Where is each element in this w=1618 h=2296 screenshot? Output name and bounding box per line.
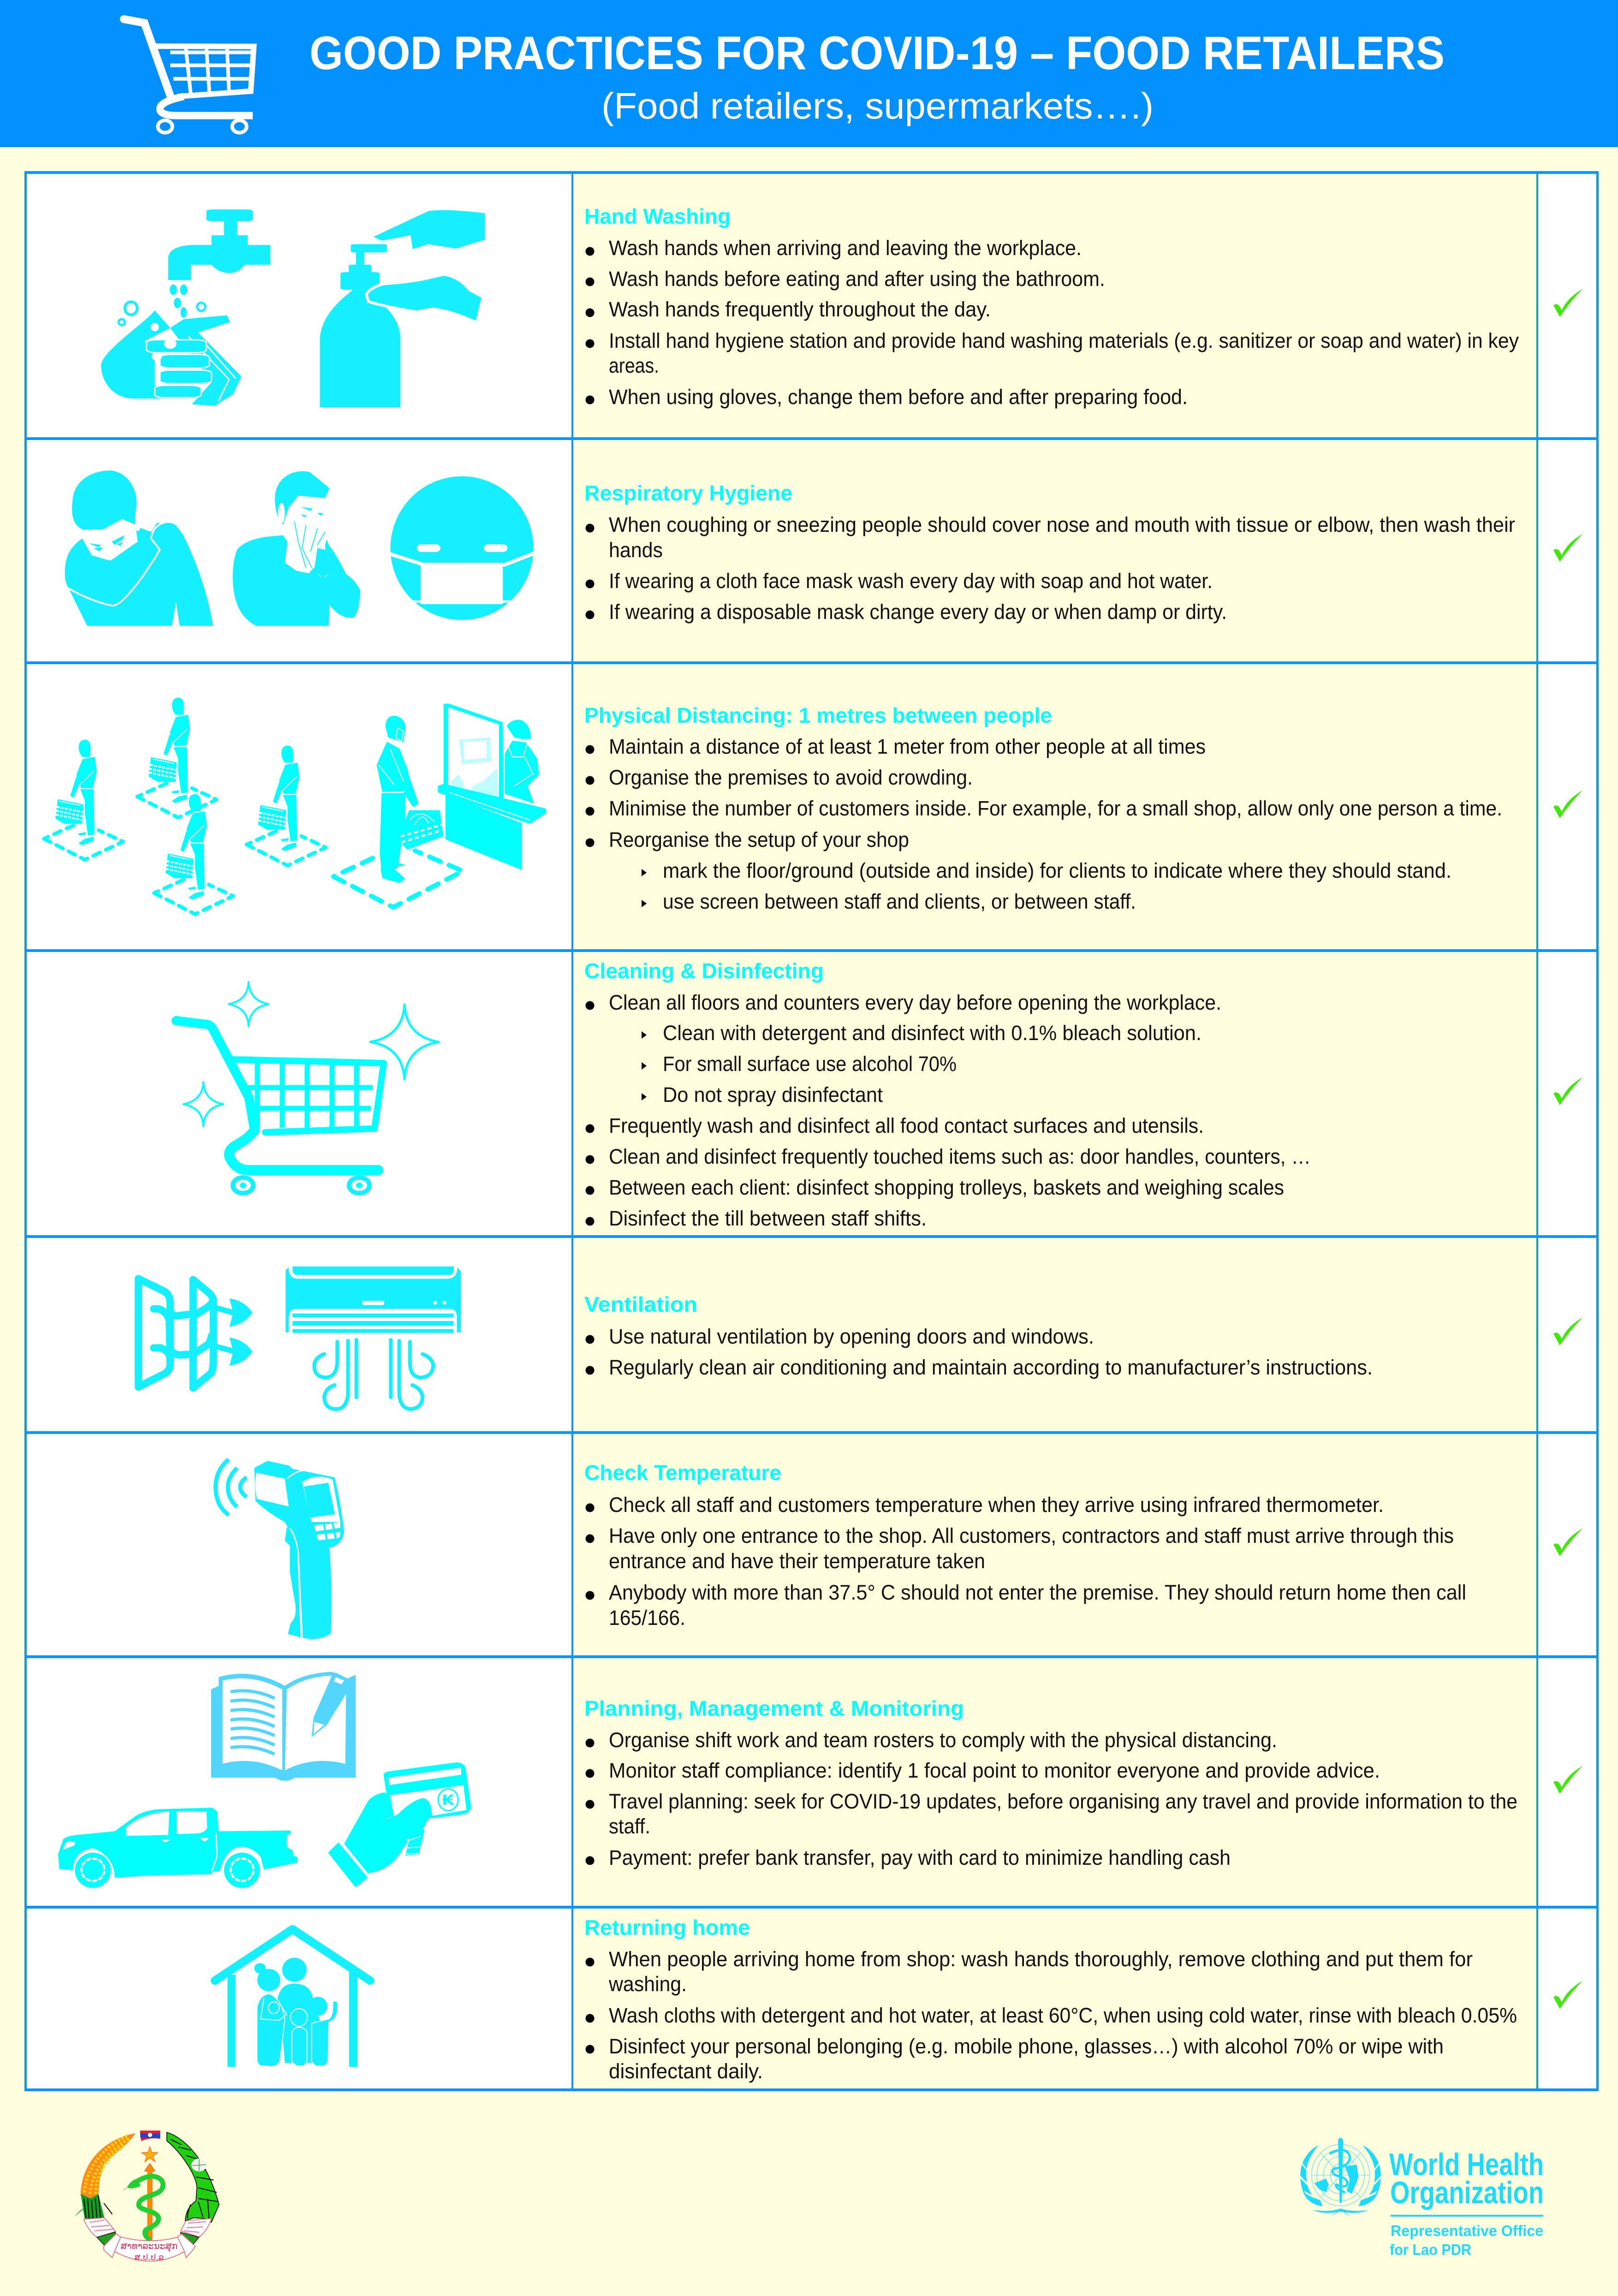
text block: hand washing: Wash hands before eating and after using the bathroom. (609, 267, 1105, 291)
text block: physical distancing: Reorganise the setup of your shop (609, 828, 909, 851)
panel: returning home (215, 1915, 1517, 2083)
text block: respiratory hygiene: Respiratory Hygiene (584, 481, 792, 505)
icon: book and pencil (211, 1672, 356, 1781)
text block: ventilation: Regularly clean air conditioning and maintain according to manufacturer’s instructions. (609, 1356, 1373, 1379)
icon: man coughing into elbow (65, 470, 213, 626)
text block: planning: Organise shift work and team rosters to comply with the physical distancing. (609, 1728, 1277, 1752)
icon: soap dispenser with hands (320, 210, 485, 407)
icon: hand holding payment card (328, 1762, 471, 1887)
icon: open windows with airflow (138, 1279, 252, 1388)
panel: ventilation (138, 1267, 1373, 1409)
text block: returning home: washing. (608, 1972, 687, 1996)
text block: respiratory hygiene: If wearing a disposable mask change every day or when damp or dirty. (609, 600, 1227, 624)
column of green check marks (1553, 289, 1583, 2009)
logo: Lao Ministry of Health emblem: ສາທາລະນະສຸກ (121, 2241, 178, 2252)
text block: returning home (584, 1915, 1517, 2083)
text block: returning home: disinfectant daily. (609, 2059, 763, 2083)
text block: check temperature: Check all staff and customers temperature when they arrive using infrared thermometer. (609, 1493, 1384, 1517)
text block: returning home: When people arriving home from shop: wash hands thoroughly, remove clothing and put them for (609, 1947, 1473, 1971)
icon: man sneezing into tissue (233, 471, 360, 626)
text block: hand washing: Wash hands when arriving and leaving the workplace. (609, 236, 1082, 260)
text block: physical distancing: mark the floor/ground (outside and inside) for clients to indicate where they should stand. (663, 859, 1451, 882)
text block: check temperature: entrance and have their temperature taken (609, 1549, 985, 1573)
text block: physical distancing: Physical Distancing: 1 metres between people (584, 703, 1052, 727)
text block: planning (584, 1696, 1517, 1869)
text block: respiratory hygiene: If wearing a cloth face mask wash every day with soap and hot water. (609, 569, 1213, 593)
icon: tap and washing hands (101, 209, 270, 406)
text block: cleaning and disinfecting (584, 959, 1311, 1230)
text block: hand washing: When using gloves, change them before and after preparing food. (609, 385, 1188, 409)
WHO emblem (1300, 2138, 1381, 2216)
text block: cleaning and disinfecting: Clean with detergent and disinfect with 0.1% bleach solution. (663, 1021, 1202, 1045)
text block: physical distancing (584, 703, 1502, 913)
logo: Lao Ministry of Health emblem (75, 2130, 219, 2262)
text block: returning home: Disinfect your personal belonging (e.g. mobile phone, glasses…) with alcohol 70% or wipe with (609, 2034, 1444, 2058)
text block: check temperature: Anybody with more than 37.5° C should not enter the premise. They should return home then call (609, 1581, 1466, 1604)
text block: physical distancing: Minimise the number of customers inside. For example, for a small shop, allow only one person a time. (609, 797, 1502, 820)
text block: check temperature: Have only one entrance to the shop. All customers, contractors and staff must arrive through this (609, 1524, 1454, 1547)
logo: World Health Organization (1300, 2138, 1544, 2258)
text block: planning: Payment: prefer bank transfer, pay with card to minimize handling cash (609, 1846, 1231, 1869)
text block: hand washing (584, 204, 1519, 409)
icon: air conditioner (286, 1267, 461, 1409)
text block: check temperature: 165/166. (609, 1606, 685, 1630)
text block: cleaning and disinfecting: Between each client: disinfect shopping trolleys, baskets and weighing scales (609, 1176, 1284, 1199)
text block: cleaning and disinfecting: Frequently wash and disinfect all food contact surfaces and utensils. (609, 1114, 1204, 1137)
logo: Lao Ministry of Health emblem: ສ.ປ.ປ.ລ (134, 2253, 164, 2262)
WHO name: World Health (1389, 2147, 1544, 2182)
text block: physical distancing: use screen between staff and clients, or between staff. (663, 890, 1136, 913)
text block: cleaning and disinfecting: Do not spray disinfectant (663, 1083, 883, 1106)
panel: planning, management and monitoring (58, 1672, 1517, 1888)
icon: family in house (215, 1929, 370, 2067)
text block: planning: Planning, Management & Monitoring (584, 1696, 964, 1720)
header banner (0, 0, 1618, 147)
panel: cleaning and disinfecting (176, 959, 1311, 1230)
panel: check temperature (216, 1459, 1466, 1639)
icon: face with mask (390, 476, 535, 620)
WHO name line 2: Organization (1390, 2175, 1544, 2210)
icon: clean shopping cart with sparkles (176, 982, 439, 1193)
text block: cleaning and disinfecting: Clean and disinfect frequently touched items such as: door handles, counters, … (609, 1145, 1311, 1168)
text block: returning home: Returning home (584, 1915, 750, 1939)
text block: physical distancing: Organise the premises to avoid crowding. (609, 766, 973, 789)
text block: hand washing: Hand Washing (584, 204, 731, 228)
icon: infrared thermometer (216, 1459, 344, 1639)
text block: planning: Travel planning: seek for COVID-19 updates, before organising any travel and provide information to the (609, 1790, 1517, 1813)
text block: hand washing: areas. (609, 354, 659, 377)
icon: customer at screened counter (333, 703, 546, 907)
text block: check temperature: Check Temperature (584, 1461, 781, 1485)
title: GOOD PRACTICES FOR COVID-19 – FOOD RETAILERS (309, 27, 1445, 79)
panel: respiratory hygiene (65, 470, 1515, 626)
text block: ventilation: Ventilation (584, 1292, 697, 1316)
icon: pickup truck (58, 1808, 297, 1888)
panel: physical distancing (44, 698, 1502, 914)
text block: cleaning and disinfecting: Disinfect the till between staff shifts. (609, 1207, 927, 1230)
text block: hand washing: Install hand hygiene station and provide hand washing materials (e.g. sanitizer or soap and water) in key (609, 329, 1519, 352)
text block: hand washing: Wash hands frequently throughout the day. (609, 297, 991, 321)
text block: ventilation: Use natural ventilation by opening doors and windows. (609, 1325, 1094, 1348)
icon: shoppers standing on floor markers (44, 698, 326, 914)
text block: respiratory hygiene: hands (609, 538, 663, 562)
office location: for Lao PDR (1390, 2241, 1471, 2258)
text block: check temperature (584, 1461, 1466, 1630)
text block: cleaning and disinfecting: For small surface use alcohol 70% (663, 1052, 957, 1076)
text block: respiratory hygiene: When coughing or sneezing people should cover nose and mouth with tissue or elbow, then wash their (609, 513, 1515, 536)
text block: cleaning and disinfecting: Cleaning & Disinfecting (584, 959, 824, 983)
office name: Representative Office (1391, 2222, 1543, 2239)
text block: physical distancing: Maintain a distance of at least 1 meter from other people at all times (609, 735, 1206, 758)
text block: planning: staff. (609, 1814, 650, 1838)
text block: ventilation (584, 1292, 1373, 1379)
icon: shopping cart (124, 19, 254, 133)
icon: hand holding payment card: ₭ (442, 1792, 455, 1808)
panel: hand washing (101, 204, 1519, 409)
text block: respiratory hygiene (584, 481, 1515, 624)
subtitle: (Food retailers, supermarkets….) (601, 85, 1154, 126)
text block: planning: Monitor staff compliance: identify 1 focal point to monitor everyone and provide advice. (609, 1759, 1380, 1782)
text block: cleaning and disinfecting: Clean all floors and counters every day before opening the workplace. (609, 991, 1221, 1014)
text block: returning home: Wash cloths with detergent and hot water, at least 60°C, when using cold water, rinse with bleach 0.05% (609, 2004, 1517, 2027)
